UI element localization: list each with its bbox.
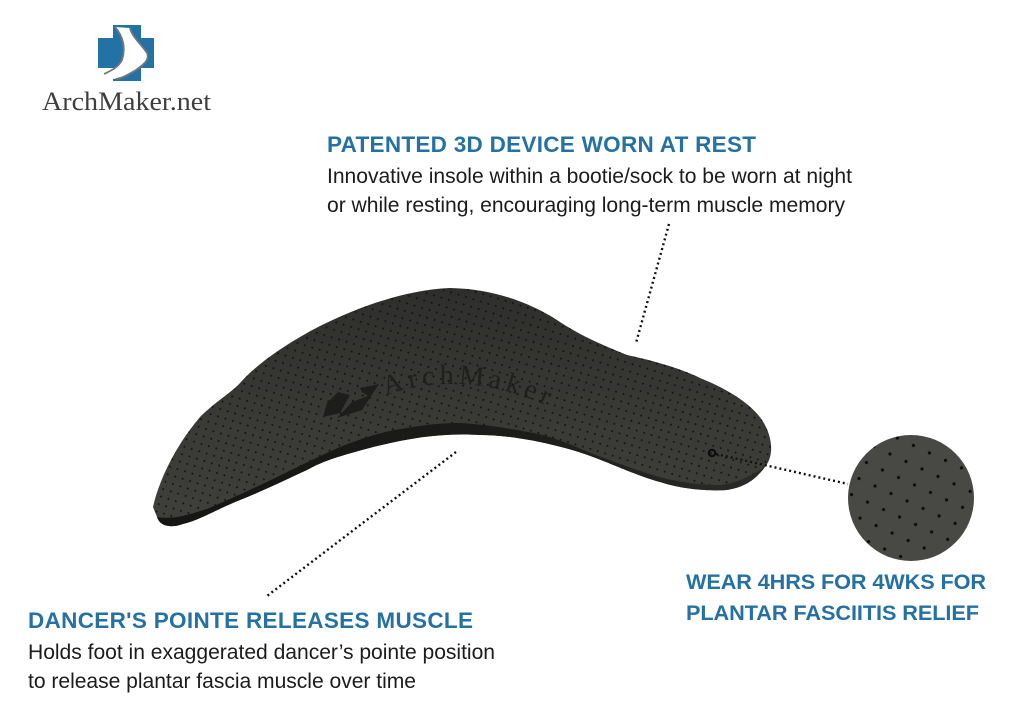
embossed brand xyxy=(324,364,552,418)
callout: dancer's pointe xyxy=(28,608,495,693)
insole perforations xyxy=(153,288,771,526)
heading: DANCER'S POINTE RELEASES MUSCLE xyxy=(28,608,473,633)
body text: or while resting, encouraging long-term muscle memory xyxy=(327,194,845,217)
icon: blue cross with foot xyxy=(98,25,154,81)
heading: PATENTED 3D DEVICE WORN AT REST xyxy=(327,132,756,157)
dotted leader: dancer's pointe xyxy=(267,452,456,596)
logo: ArchMaker.net xyxy=(42,25,212,116)
callout: wear 4hrs xyxy=(686,569,986,625)
logo wordmark: ArchMaker.net xyxy=(42,86,212,116)
body text xyxy=(327,165,852,217)
heading line 2: PLANTAR FASCIITIS RELIEF xyxy=(686,600,979,625)
body text xyxy=(28,641,495,693)
body text: to release plantar fascia muscle over time xyxy=(28,670,416,693)
dotted leader: texture xyxy=(709,450,848,484)
dotted leader: device xyxy=(636,224,669,343)
heading line 1: WEAR 4HRS FOR 4WKS FOR xyxy=(686,569,986,594)
texture close-up circle xyxy=(848,435,974,561)
insole dark sole edge xyxy=(157,423,765,526)
callout: patented 3D device xyxy=(327,132,852,217)
insole body xyxy=(153,288,771,526)
insole photo xyxy=(153,288,772,526)
body text: Holds foot in exaggerated dancer’s pointe position xyxy=(28,641,495,664)
embossed brand: ArchMaker xyxy=(386,364,552,404)
body text: Innovative insole within a bootie/sock to be worn at night xyxy=(327,165,852,188)
